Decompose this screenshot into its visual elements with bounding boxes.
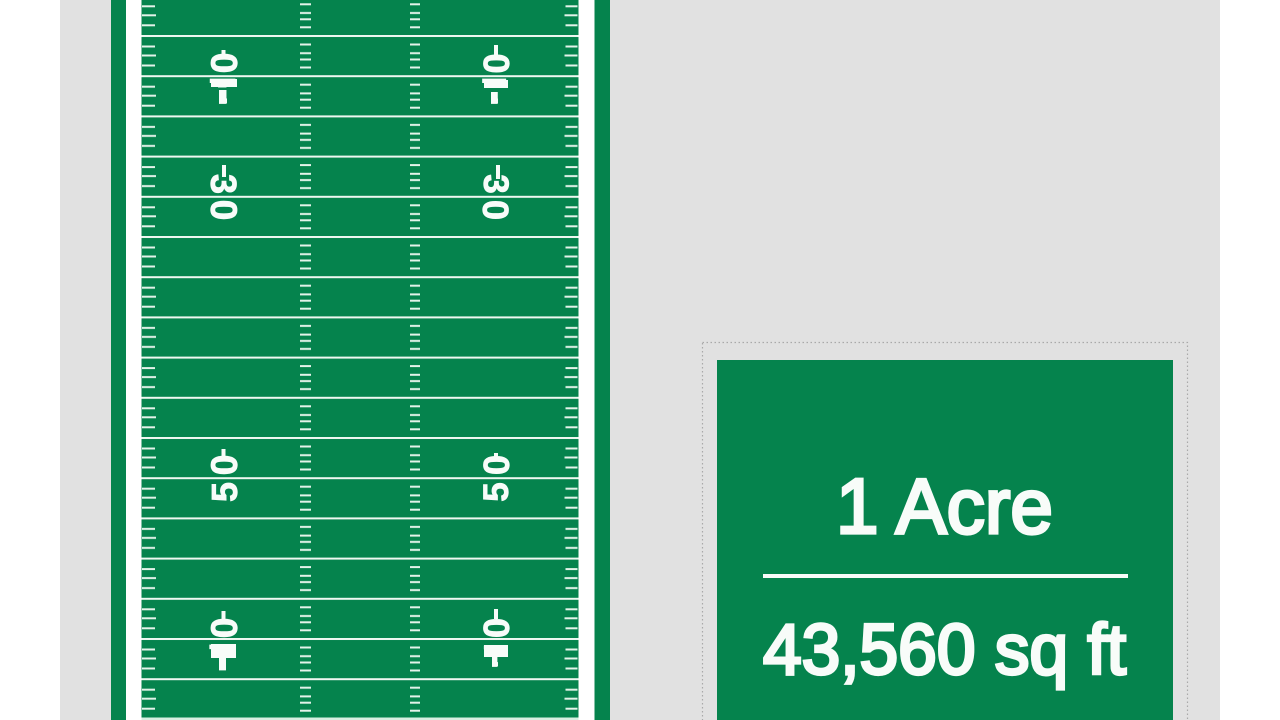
yard number: lower left 50 — [204, 449, 245, 502]
yard number: upper right 30: 3 — [476, 174, 515, 194]
field turf — [142, 0, 578, 718]
panel: one acre comparison — [702, 342, 1188, 720]
yard number: lower right 50: 0 — [476, 455, 517, 475]
yard number: top right 10 — [476, 45, 517, 110]
field bottom line — [142, 718, 578, 720]
yard number: upper left 30: 0 — [203, 200, 244, 220]
yard number: bottom right 10: 1 — [483, 639, 507, 673]
yard number: upper left 30: 3 — [203, 174, 244, 194]
yard number: upper left 30 — [203, 165, 244, 220]
yard number: lower right 50 — [476, 453, 517, 502]
panel: football field — [111, 0, 610, 720]
yard number: bottom right 10 — [476, 609, 517, 673]
yard number: bottom left 10 — [204, 611, 245, 678]
acre divider — [763, 574, 1128, 578]
yard number: top right 10: 1 — [481, 71, 509, 110]
yard number: top right 10: 0 — [476, 53, 517, 74]
yard number: upper right 30 — [475, 165, 516, 220]
acre green square — [717, 360, 1173, 720]
yard number: lower left 50: 5 — [204, 482, 245, 502]
yard number: top left 10: 1 — [209, 71, 238, 110]
yard number: upper right 30: 0 — [475, 200, 516, 220]
acre label: 1 Acre — [836, 462, 1053, 550]
yard lines and hash marks — [142, 0, 578, 718]
yard number: top left 10: 0 — [204, 53, 245, 73]
yard number: bottom left 10: 1 — [208, 637, 239, 678]
field white sideline band — [126, 0, 594, 720]
acre square footage: 43,560 sq ft — [763, 611, 1126, 690]
dotted acre outline — [702, 342, 1188, 720]
yard number: bottom left 10: 0 — [204, 618, 245, 638]
yard number: lower left 50: 0 — [204, 455, 245, 475]
yard number: top left 10 — [204, 50, 245, 110]
yard number: lower right 50: 5 — [477, 482, 516, 502]
yard number: bottom right 10: 0 — [476, 618, 517, 638]
field outer green border — [111, 0, 610, 720]
